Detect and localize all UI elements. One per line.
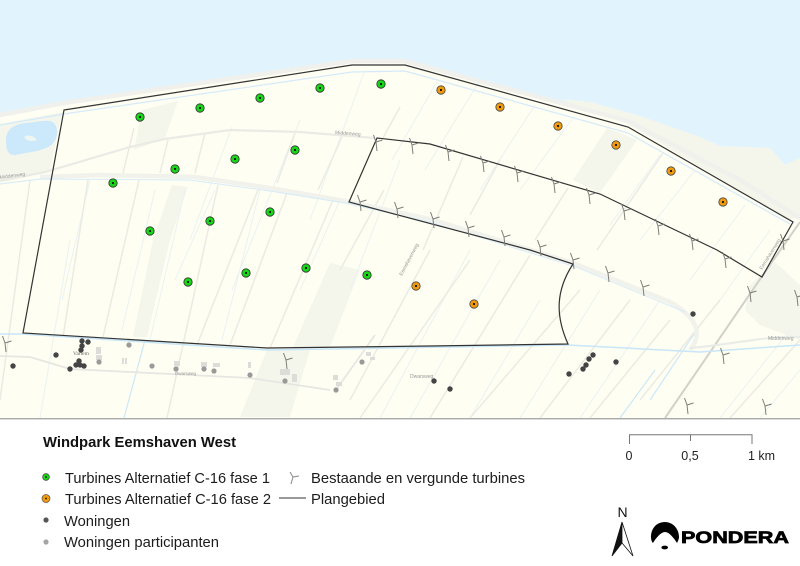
logo: Pondera: PONDERA xyxy=(681,529,789,547)
ditches xyxy=(40,70,800,418)
road labels: Middenweg xyxy=(0,171,26,181)
road labels: Eemshavenweg xyxy=(759,238,783,271)
road labels: Middenweg xyxy=(335,130,361,138)
canal xyxy=(0,334,800,352)
buildings xyxy=(96,347,375,386)
legend xyxy=(42,471,525,551)
scale bar xyxy=(626,435,775,463)
road labels: Eemshavenweg xyxy=(398,243,421,277)
title: Windpark Eemshaven West xyxy=(43,435,236,451)
woningen xyxy=(10,311,696,392)
legend: woningen: Woningen xyxy=(64,514,130,530)
legend: bestaande turbines: Bestaande en vergunde turbines xyxy=(311,471,525,487)
Dwarsweg road xyxy=(0,335,375,390)
map panel xyxy=(0,0,800,419)
lower road band xyxy=(40,175,697,350)
woningen participanten xyxy=(96,342,365,393)
legend: turbines fase 1: Turbines Alternatief C-16 fase 1 xyxy=(65,471,270,487)
road labels: Varlem xyxy=(73,351,90,357)
road labels: Dwarsweg xyxy=(175,371,197,376)
legend: turbines fase 2: Turbines Alternatief C-16 fase 2 xyxy=(65,492,271,508)
map frame line xyxy=(0,418,800,419)
legend: plangebied: Plangebied xyxy=(311,492,385,508)
land xyxy=(0,62,800,419)
lake xyxy=(6,121,57,155)
base map xyxy=(0,61,800,419)
tracks xyxy=(0,107,800,418)
scale bar: 0,5 xyxy=(681,449,699,463)
plangebied boundary xyxy=(23,65,793,348)
legend: woningen participanten: Woningen participanten xyxy=(64,535,219,551)
north arrow: N xyxy=(617,504,628,520)
road labels: Middenweg xyxy=(768,336,794,342)
road labels xyxy=(0,130,794,380)
legend: plangebied xyxy=(279,492,385,508)
scale bar: 1 km xyxy=(748,449,775,463)
north arrow xyxy=(612,504,633,556)
road labels: Dwarsweg xyxy=(410,374,434,380)
scale bar: 0 xyxy=(626,449,633,463)
Middenweg road xyxy=(0,130,375,181)
main diagonal road xyxy=(665,222,800,418)
logo: Pondera xyxy=(651,522,789,549)
turbines fase 1 xyxy=(109,80,385,286)
salt marsh and green areas xyxy=(0,99,800,417)
turbines fase 2 xyxy=(412,86,727,308)
blue ditches xyxy=(0,325,700,418)
dike xyxy=(0,61,800,218)
existing turbines xyxy=(2,135,800,415)
